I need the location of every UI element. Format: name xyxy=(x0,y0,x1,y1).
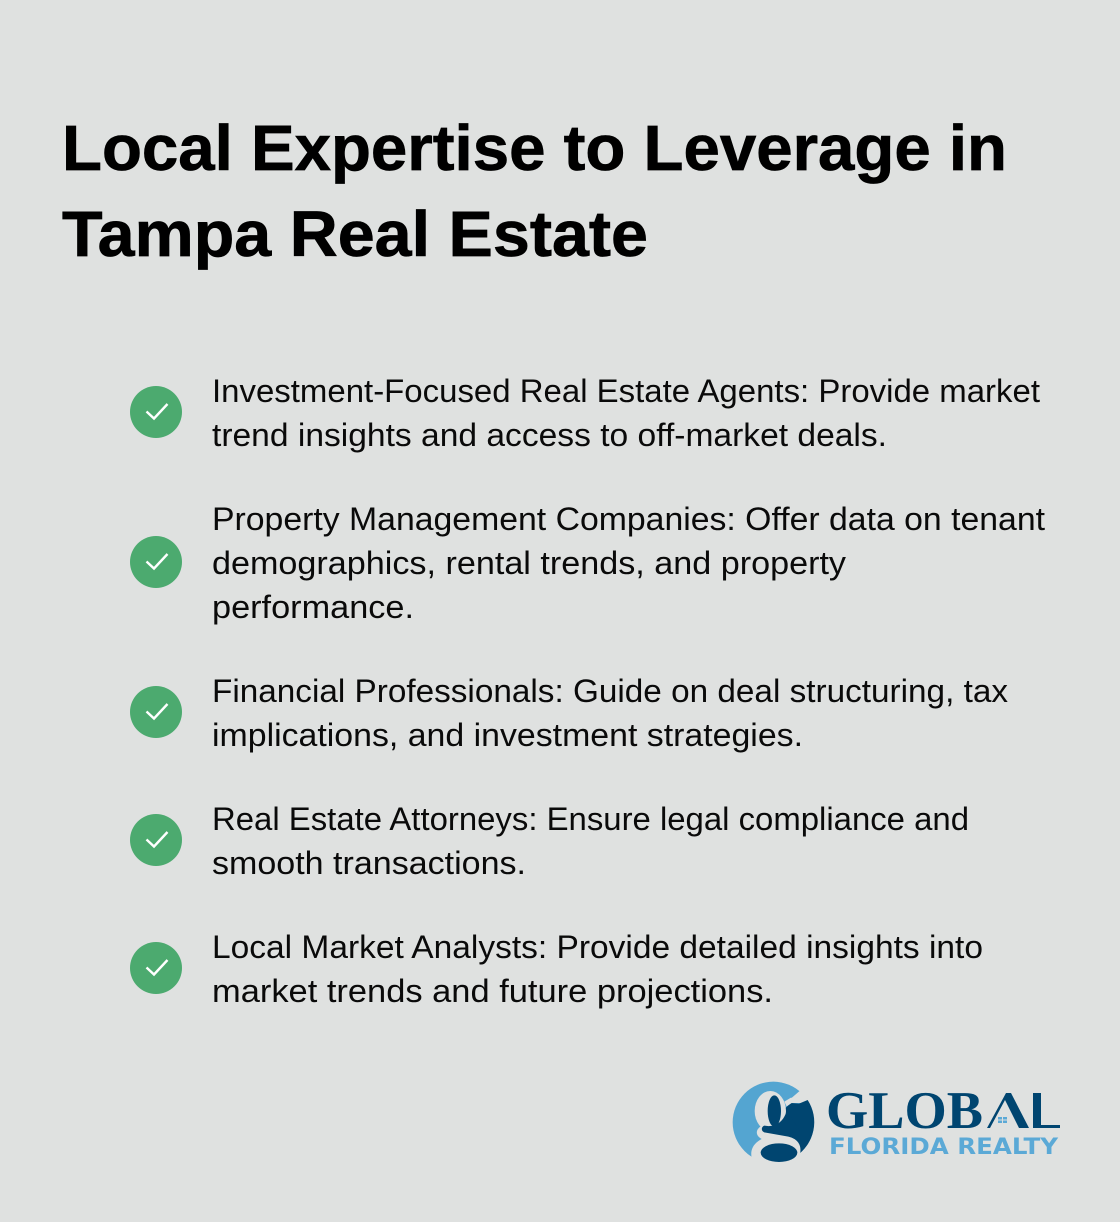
title: Local Expertise to Leverage in xyxy=(62,112,1007,184)
text: local market analysts xyxy=(212,929,983,1009)
text: financial professionals: implications, and investment strategies. xyxy=(212,717,803,753)
list item: property management xyxy=(130,501,1045,625)
text: real estate attorneys: Real Estate Attorneys: Ensure legal compliance and xyxy=(212,801,969,837)
text: financial professionals xyxy=(212,673,1008,753)
title: Tampa Real Estate xyxy=(62,198,648,270)
list item: real estate attorneys xyxy=(130,801,969,881)
logo: Global Florida Realty xyxy=(733,1082,1060,1164)
icon: green check xyxy=(130,686,182,738)
icon: green check xyxy=(130,814,182,866)
text: property management: performance. xyxy=(212,589,414,625)
list item: local market analysts xyxy=(130,929,983,1009)
icon: green check xyxy=(130,942,182,994)
logo wordmark: GLOBAL: GLOB xyxy=(826,1082,983,1140)
logo wordmark: GLOBAL xyxy=(826,1082,1060,1140)
icon: green check xyxy=(130,386,182,438)
text: investment-focused agents xyxy=(212,373,1040,453)
text: real estate attorneys xyxy=(212,801,969,881)
icon: green check xyxy=(130,536,182,588)
text: real estate attorneys: smooth transactions. xyxy=(212,845,526,881)
title xyxy=(62,112,1007,270)
text: investment-focused agents: Investment-Focused Real Estate Agents: Provide market xyxy=(212,373,1040,409)
icon: g monogram xyxy=(733,1082,817,1164)
text: investment-focused agents: trend insights and access to off-market deals. xyxy=(212,417,887,453)
text: property management: Property Management Companies: Offer data on tenant xyxy=(212,501,1045,537)
text: local market analysts: Local Market Analysts: Provide detailed insights into xyxy=(212,929,983,965)
logo wordmark: FLORIDA REALTY: FLORIDA REALTY xyxy=(829,1135,1059,1160)
list item: investment-focused agents xyxy=(130,373,1040,453)
text: local market analysts: market trends and future projections. xyxy=(212,973,773,1009)
text: financial professionals: Financial Professionals: Guide on deal structuring, tax xyxy=(212,673,1008,709)
text: property management: demographics, rental trends, and property xyxy=(212,545,846,581)
list item: financial professionals xyxy=(130,673,1008,753)
text: property management xyxy=(212,501,1045,625)
